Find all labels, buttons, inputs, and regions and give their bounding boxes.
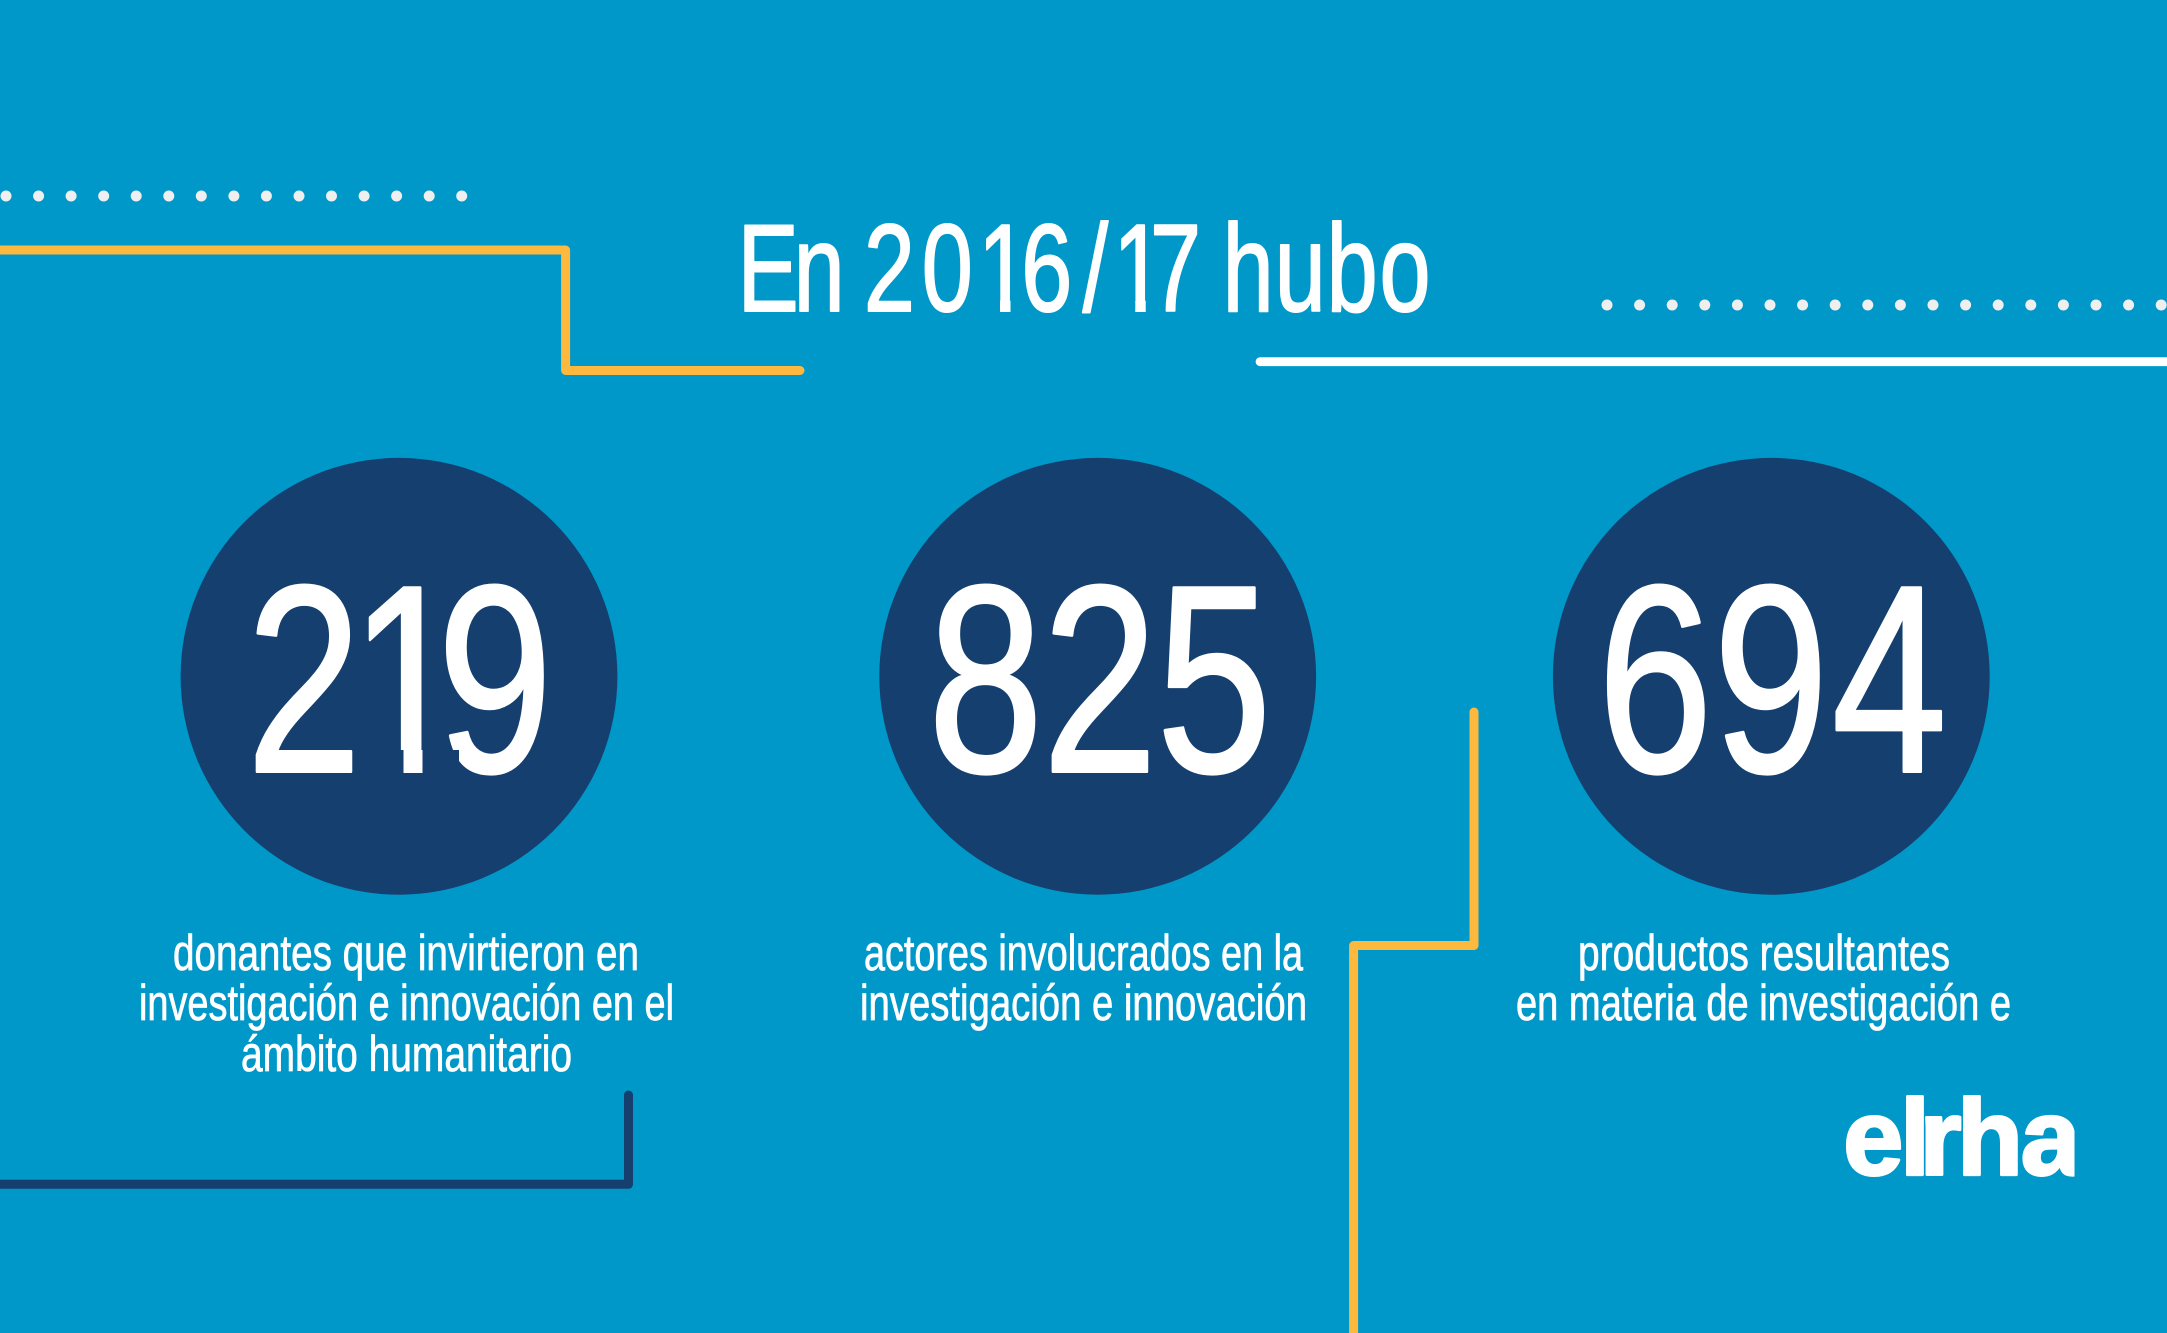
white line: top right (1260, 357, 2167, 366)
logo: elrha: elrha (1843, 1076, 2082, 1198)
panel: donantes (139, 458, 674, 1082)
caption: actores: actores involucrados en la (864, 925, 1303, 981)
circle: 694 (1553, 458, 1990, 895)
dotted line: top right (1602, 300, 2167, 310)
number: 219: 219 (246, 530, 552, 829)
panel: actores (860, 458, 1316, 1031)
caption: donantes: donantes que invirtieron en (173, 925, 639, 981)
caption: donantes (139, 925, 674, 1082)
dotted line: top left (0, 190, 467, 202)
panel: productos (1516, 458, 2011, 1031)
caption: productos (1516, 925, 2011, 1031)
circle: 219 (181, 458, 617, 895)
number: 694: 694 (1598, 530, 1947, 829)
title: En 2016/17 hubo (737, 200, 1431, 338)
caption: donantes: ámbito humanitario (241, 1026, 572, 1082)
caption: donantes: investigación e innovación en el (139, 975, 674, 1031)
navy stepped line: bottom left (0, 1095, 628, 1184)
circle: 825 (879, 458, 1316, 895)
caption: actores (860, 925, 1307, 1031)
caption: productos: productos resultantes (1578, 925, 1950, 981)
caption: productos: en materia de investigación e (1516, 975, 2011, 1031)
caption: actores: investigación e innovación (860, 975, 1307, 1031)
yellow stepped line: bottom right (1354, 712, 1474, 1333)
yellow stepped line: top left (0, 250, 800, 370)
number: 825: 825 (928, 530, 1272, 829)
